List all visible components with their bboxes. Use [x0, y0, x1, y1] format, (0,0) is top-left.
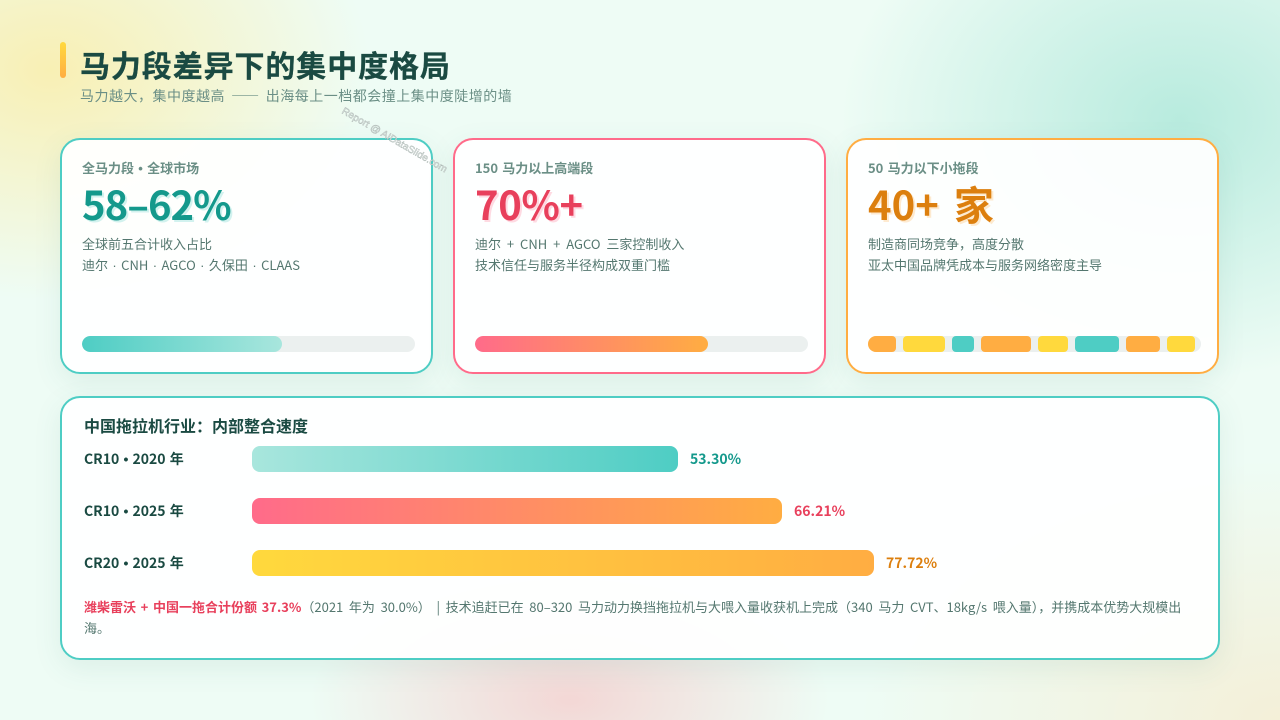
- label: global: 全马力段 • 全球市场: [82, 158, 199, 177]
- bar: [252, 498, 782, 524]
- panel: China consolidation: [60, 396, 1220, 660]
- label: high end: 150 马力以上高端段: [475, 158, 593, 177]
- title: 马力段差异下的集中度格局: [80, 42, 451, 86]
- description: high end: 技术信任与服务半径构成双重门槛: [475, 254, 670, 274]
- label: small tractors: 50 马力以下小拖段: [868, 158, 979, 177]
- panel: above 150 hp: [453, 138, 826, 374]
- bar: [252, 550, 874, 576]
- description: global: 全球前五合计收入占比: [82, 234, 212, 253]
- footnote: [84, 597, 1181, 637]
- footnote: 海。: [84, 618, 110, 637]
- description: global: [82, 234, 300, 274]
- subtitle: 马力越大，集中度越高 —— 出海每上一档都会撞上集中度陡增的墙: [80, 86, 512, 106]
- stat: 40+ firms: 40+ 家: [868, 174, 994, 232]
- title accent bar: [60, 42, 66, 78]
- description: small tractors: [868, 234, 1102, 274]
- description: high end: [475, 234, 684, 274]
- bar row: CR10 2020: [84, 446, 741, 472]
- panel heading: 中国拖拉机行业：内部整合速度: [84, 413, 308, 437]
- progress bar: 60%: [82, 336, 415, 352]
- panel: global market: [60, 138, 433, 374]
- stat: 70%+: 70%+: [475, 174, 583, 232]
- description: small tractors: 制造商同场竞争，高度分散: [868, 234, 1024, 253]
- value: 66.21%: [794, 501, 845, 521]
- bar: [252, 446, 678, 472]
- footnote: 潍柴雷沃 + 中国一拖合计份额 37.3%（2021 年为 30.0%） | 技术追赶已在 80–320 马力动力换挡拖拉机与大喂入量收获机上完成（340 马力 CVT、18kg/s 喂入量），并携成本优势大规模出: [84, 597, 1181, 616]
- watermark: Report @ AIDataSlide.com: [340, 106, 449, 175]
- bar row: CR10 2025: [84, 498, 845, 524]
- progress bar: 70%: [475, 336, 808, 352]
- segmented bar: [868, 336, 1201, 352]
- row label: CR20 • 2025 年: [84, 553, 184, 573]
- description: global: 迪尔 · CNH · AGCO · 久保田 · CLAAS: [82, 254, 300, 274]
- row label: CR10 • 2020 年: [84, 449, 184, 469]
- panel: below 50 hp: [846, 138, 1219, 374]
- stat: 58–62%: 58–62%: [82, 174, 231, 232]
- description: small tractors: 亚太中国品牌凭成本与服务网络密度主导: [868, 254, 1102, 274]
- value: 77.72%: [886, 553, 937, 573]
- description: high end: 迪尔 + CNH + AGCO 三家控制收入: [475, 234, 684, 253]
- value: 53.30%: [690, 449, 741, 469]
- bar row: CR20 2025: [84, 550, 937, 576]
- row label: CR10 • 2025 年: [84, 501, 184, 521]
